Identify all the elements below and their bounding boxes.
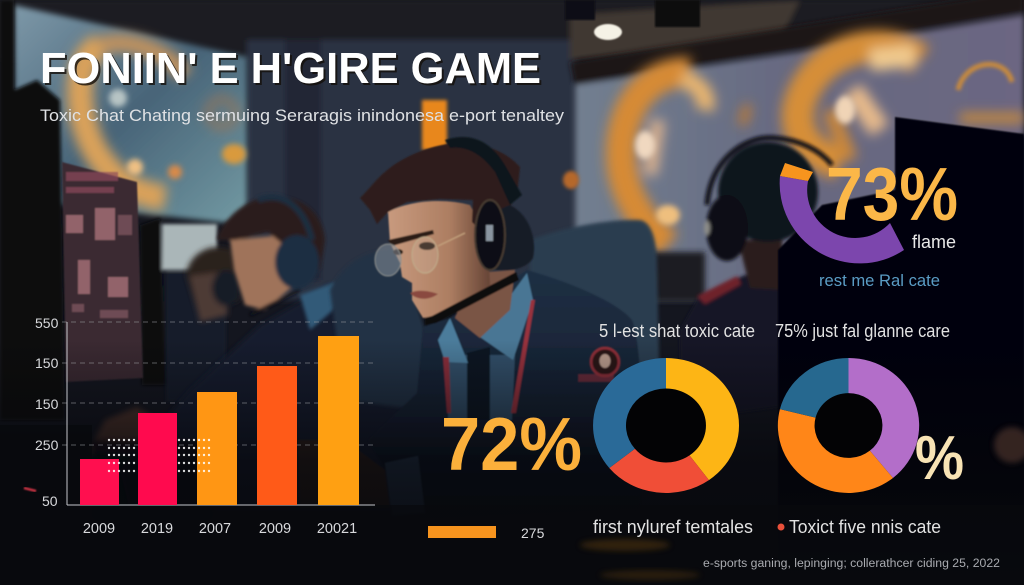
bars xyxy=(80,336,359,505)
heading: first donut: 5 l-est shat toxic cate xyxy=(599,321,755,341)
chart gridlines and axes xyxy=(62,322,376,505)
x-axis year labels xyxy=(83,521,357,537)
left player xyxy=(88,197,440,520)
left black monitor silhouette and stand xyxy=(0,0,226,420)
left wall screen xyxy=(14,5,247,225)
crest badge on jacket xyxy=(578,348,619,382)
y-axis labels: 150 xyxy=(35,355,59,371)
y-axis labels xyxy=(35,315,59,509)
bar chart: yearly toxic chat xyxy=(35,315,376,537)
stat: percent sign: % xyxy=(915,424,964,493)
y-axis labels: 50 xyxy=(42,493,58,509)
second background player, small xyxy=(186,247,240,322)
ceiling and wall xyxy=(0,0,1024,300)
footer source note: e-sports ganing, lepinging; collerathcer ciding 25, 2022 xyxy=(703,558,1000,570)
ceiling fixtures xyxy=(565,0,700,40)
legend swatch and value: 275 xyxy=(521,525,545,541)
darkened desk foreground xyxy=(0,340,1024,585)
x-axis year labels: 2009 xyxy=(259,521,291,537)
y-axis labels: 150 xyxy=(35,396,59,412)
right wall screen xyxy=(570,0,1024,300)
x-axis year labels: 2007 xyxy=(199,521,231,537)
x-axis year labels: 2009 xyxy=(83,521,115,537)
top-right partial ring chart xyxy=(780,163,904,263)
front player chairs xyxy=(330,220,660,410)
stat: 72%: 72% xyxy=(441,402,582,486)
heading: second donut: 75% just fal glanne care xyxy=(775,321,950,341)
dot pattern over bars xyxy=(108,439,210,472)
front player figure xyxy=(298,137,642,520)
orange wall light strip and lamp xyxy=(422,100,579,189)
subtitle: Toxic Chat Chating sermuing Seraragis inindonesa e-port tenaltey xyxy=(40,106,565,125)
y-axis labels: 550 xyxy=(35,315,59,331)
title: FONIIN' E H'GIRE GAME xyxy=(40,44,541,93)
legend: toxic five: Toxict five nnis cate xyxy=(789,517,941,537)
y-axis labels: 250 xyxy=(35,437,59,453)
legend swatch and value xyxy=(428,525,545,541)
x-axis year labels: 2019 xyxy=(141,521,173,537)
donut chart 2 xyxy=(778,358,919,493)
legend: first nyluref temtales: first nyluref temtales xyxy=(593,517,753,537)
label: rest me Ral cate: rest me Ral cate xyxy=(819,272,940,290)
stat: 73%: 73% xyxy=(826,152,958,236)
pink data monitor xyxy=(62,162,143,382)
donut chart 1 xyxy=(593,358,739,493)
x-axis year labels: 20021 xyxy=(317,521,357,537)
right background player with headset xyxy=(680,138,832,420)
right black monitor silhouette xyxy=(778,117,1024,585)
label: flame: flame xyxy=(912,232,956,252)
